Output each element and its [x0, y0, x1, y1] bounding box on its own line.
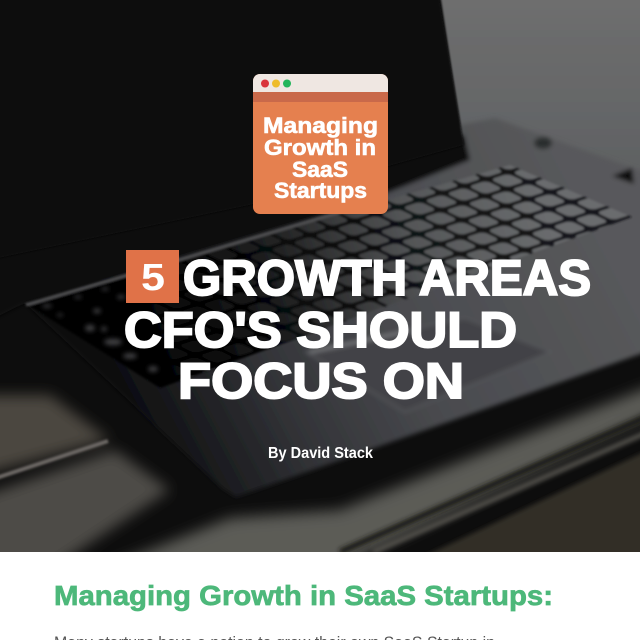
wood plank edge highlight — [0, 441, 108, 480]
keyboard bezel highlight — [26, 211, 345, 305]
number badge — [126, 250, 179, 303]
touchpad — [306, 318, 551, 412]
laptop body — [0, 118, 640, 497]
logo icon: browser window: SaaS — [292, 157, 348, 182]
logo icon: browser window — [253, 74, 388, 214]
section heading: Managing Growth in SaaS Startups: — [54, 580, 553, 611]
logo icon: browser window: Growth in — [264, 135, 376, 160]
key glints — [42, 288, 158, 372]
laptop screen — [0, 0, 464, 262]
wall behind laptop — [438, 0, 640, 190]
white content panel — [0, 552, 640, 640]
number badge: 5 — [141, 257, 165, 299]
main title — [124, 250, 591, 409]
wood planks — [0, 375, 640, 570]
logo icon: browser window: Startups — [274, 178, 367, 203]
main title: FOCUS ON — [178, 353, 464, 409]
keyboard — [25, 165, 632, 388]
byline: By David Stack — [268, 445, 373, 462]
main title: CFO'S SHOULD — [124, 302, 517, 358]
right side wood grain — [340, 402, 640, 570]
main title: GROWTH AREAS — [183, 250, 591, 306]
laptop deck — [25, 118, 640, 497]
logo icon: browser window: Managing — [263, 113, 378, 138]
hinge details — [534, 137, 552, 149]
hinge shadow area — [0, 135, 470, 330]
